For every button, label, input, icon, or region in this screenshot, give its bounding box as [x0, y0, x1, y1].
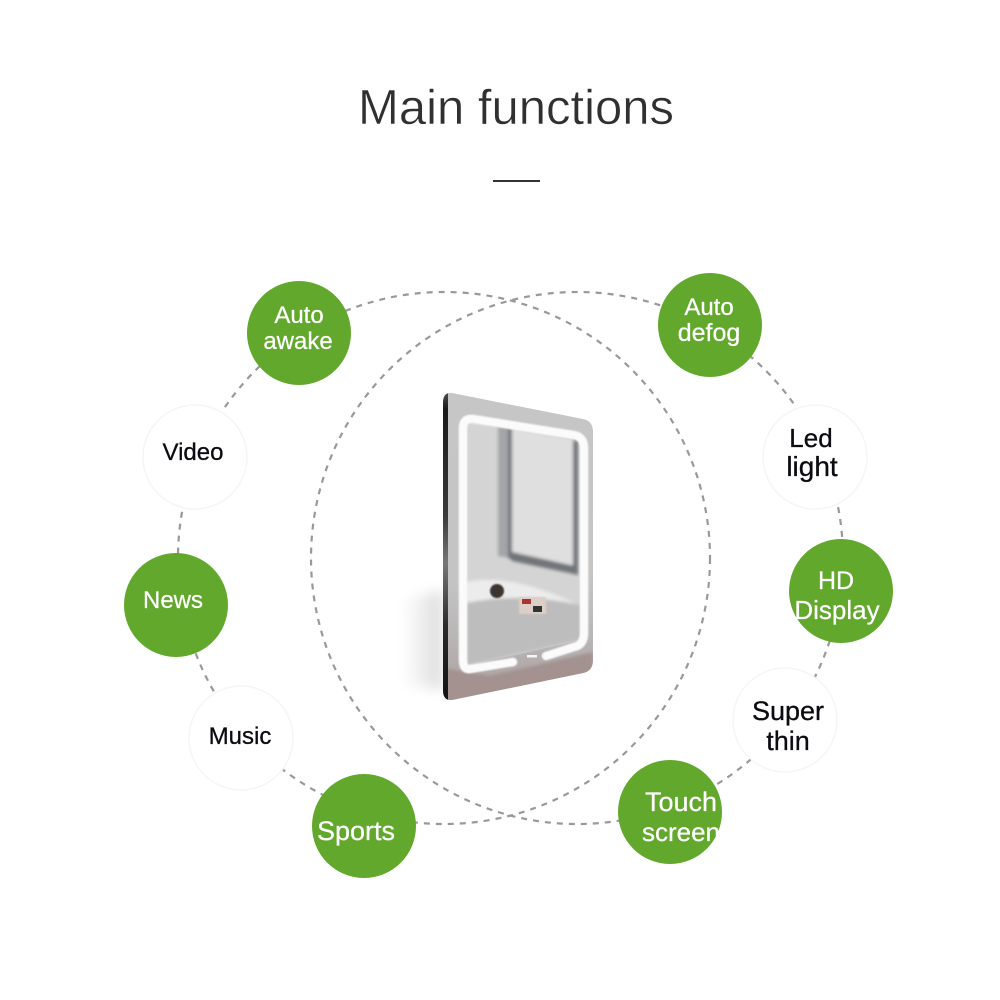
bathtub reflection [467, 579, 572, 604]
node: Sports [312, 774, 416, 878]
dashed overlapping circles [178, 292, 843, 824]
mirror screen apps [490, 584, 504, 598]
node: Auto awake: awake [263, 328, 333, 355]
LED center touch mark [527, 655, 537, 658]
mirror product image [402, 390, 596, 705]
node: HD Display: HD [818, 567, 854, 595]
node: HD Display: Display [794, 595, 880, 625]
node: Auto defog [658, 273, 762, 377]
LED frame [463, 419, 584, 669]
node: Music [189, 686, 293, 790]
node: Auto awake [247, 281, 351, 385]
title: Main functions [358, 81, 674, 135]
node: News [124, 553, 228, 657]
node: Auto defog: Auto [684, 294, 734, 321]
node: Super thin: Super [752, 696, 824, 726]
node: Led light [763, 405, 867, 509]
mirror side shadow [402, 590, 443, 690]
black side edge [443, 390, 448, 705]
node: Super thin [733, 668, 837, 772]
title underline [493, 180, 540, 182]
node: Video [143, 405, 247, 509]
node: Auto awake: Auto [274, 302, 324, 329]
node: Led light: light [786, 451, 838, 482]
node: News: News [143, 587, 203, 614]
node: Touch screen: Touch [645, 787, 717, 817]
node: Sports: Sports [317, 816, 395, 846]
node: Video: Video [163, 439, 223, 466]
node: HD Display [789, 539, 893, 643]
wall reflection [466, 422, 581, 666]
node: Touch screen: screen [642, 817, 720, 847]
node: Music: Music [209, 723, 271, 750]
node: Touch screen [618, 760, 722, 864]
floor reflection [443, 652, 593, 702]
node: Super thin: thin [766, 726, 810, 756]
node: Led light: Led [789, 423, 833, 453]
window reflection [506, 428, 575, 565]
node: Auto defog: defog [678, 319, 740, 347]
